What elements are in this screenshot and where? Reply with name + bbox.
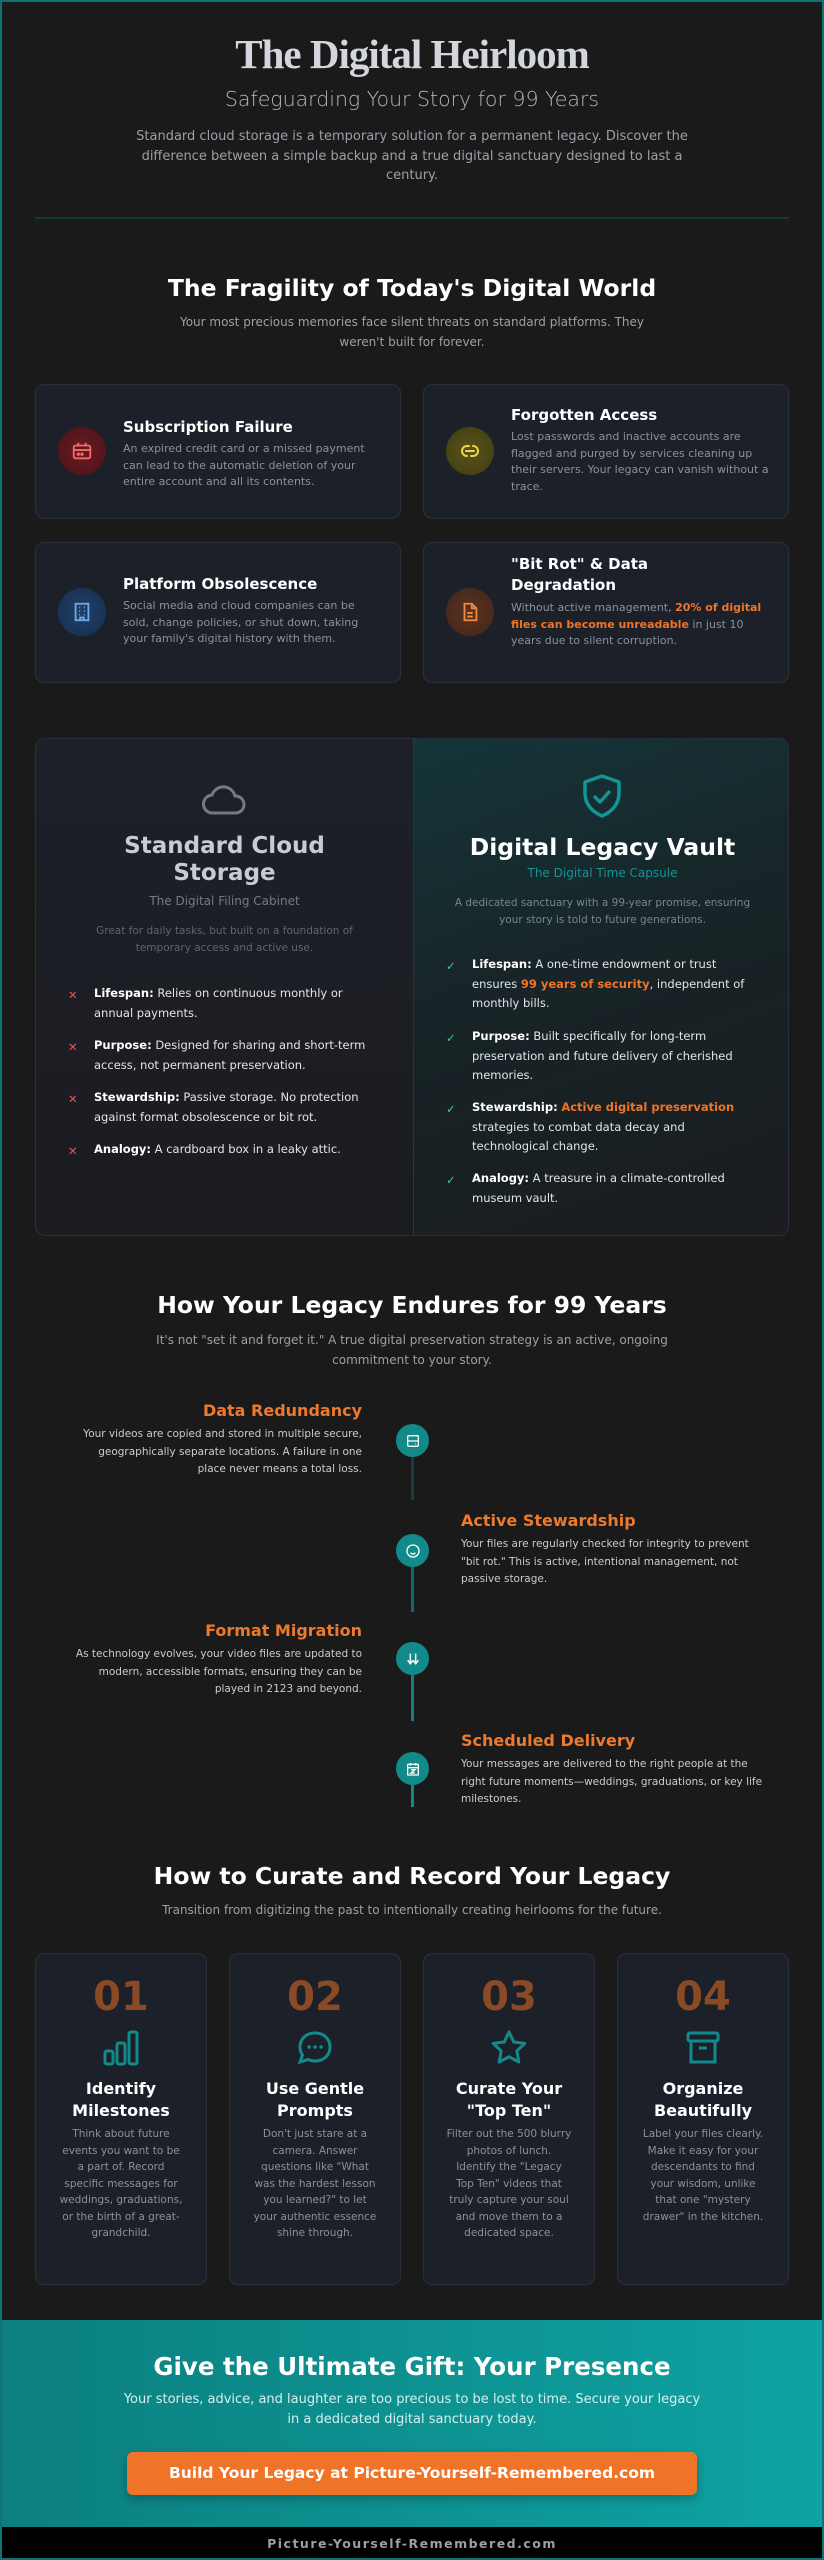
- list: cloud drawbacks: [68, 986, 365, 1158]
- icon: shield check: [583, 774, 621, 818]
- text: platform obsolescence: Platform Obsolescence: [123, 575, 317, 593]
- heading: standard cloud storage: [124, 833, 325, 886]
- step card 03: top ten: [423, 1953, 595, 2285]
- section heading: endures: How Your Legacy Endures for 99 Years: [157, 1291, 667, 1319]
- step card 02: gentle prompts: Prompts: [277, 2101, 353, 2120]
- timeline step: scheduled delivery: Scheduled Delivery: [461, 1731, 635, 1750]
- icon: building: [58, 588, 106, 636]
- step card 03: top ten: 03: [481, 1974, 537, 2020]
- step card 01: identify milestones: Identify: [86, 2079, 156, 2098]
- section heading: fragility: The Fragility of Today's Digital World: [168, 274, 656, 302]
- item: purpose: Purpose: Built specifically for long-term preservation and future delivery of cherished memories.: [472, 1029, 733, 1082]
- panel: forgotten access: [423, 384, 789, 519]
- text: subscription failure: Subscription Failure: [123, 418, 293, 436]
- text: platform obsolescence: [123, 575, 358, 645]
- step card 03: top ten: "Top Ten": [467, 2101, 551, 2120]
- panel: digital legacy vault: [413, 739, 790, 1237]
- timeline step: scheduled delivery: [461, 1731, 762, 1805]
- timeline step: format migration: As technology evolves, your video files are updated to modern, accessible formats, ensuring they can be played in 2123 and beyond.: [76, 1648, 362, 1695]
- step card 04: organize: Organize: [663, 2079, 743, 2098]
- icon: archive box: [686, 2032, 720, 2064]
- list: vault benefits: [446, 957, 745, 1204]
- list: vault benefits: ✓: [446, 1102, 456, 1116]
- icon: smile node: [396, 1534, 429, 1567]
- text: forgotten access: Lost passwords and inactive accounts are flagged and purged by services cleaning up their servers. Your legacy can vanish without a trace.: [511, 430, 769, 492]
- cta text: in a dedicated digital sanctuary today.: [287, 2412, 537, 2427]
- list: cloud drawbacks: ✕: [68, 1040, 78, 1054]
- step card 04: organize: Beautifully: [654, 2101, 752, 2120]
- header: intro text: Standard cloud storage is a temporary solution for a permanent legacy. Discover the difference between a simple backup and a true digital sanctuary designed to last a century.: [136, 129, 688, 183]
- step card 04: organize: [617, 1953, 789, 2285]
- item: purpose: Purpose: Designed for sharing and short-term access, not permanent preservation.: [94, 1038, 365, 1072]
- list: vault benefits: ✓: [446, 1031, 456, 1045]
- timeline step: data redundancy: Data Redundancy: [203, 1401, 362, 1420]
- step card 01: identify milestones: [35, 1953, 207, 2285]
- icon: document: [446, 588, 494, 636]
- timeline step: data redundancy: Your videos are copied and stored in multiple secure, geographically separate locations. A failure in one: [83, 1428, 362, 1458]
- timeline step: active stewardship: [461, 1511, 749, 1585]
- text: cloud description: Great for daily tasks, but built on a foundation of temporary access and active use.: [96, 925, 353, 954]
- step card 01: identify milestones: 01: [93, 1974, 149, 2020]
- step card 02: gentle prompts: Use Gentle: [266, 2079, 364, 2098]
- icon: forgotten link: [446, 427, 494, 475]
- icon: migration arrows node: [396, 1642, 429, 1675]
- icon: bar chart: [104, 2030, 138, 2066]
- item: stewardship: Stewardship: Active digital preservation strategies to combat data decay and technological change.: [472, 1100, 734, 1153]
- text: bit rot: Without active management, 20% of digital files can become unreadable in just 10 years due to silent corruption.: [511, 601, 761, 647]
- step card 04: organize: 04: [675, 1974, 731, 2020]
- step card 03: top ten: Curate Your: [456, 2079, 562, 2098]
- timeline step: format migration: Format Migration: [205, 1621, 362, 1640]
- item: lifespan: Lifespan: A one-time endowment or trust ensures 99 years of security, independent of monthly bills.: [472, 957, 744, 1010]
- timeline: [76, 1401, 762, 1807]
- text: bit rot: Degradation: [511, 576, 616, 594]
- list: cloud drawbacks: ✕: [68, 1144, 78, 1158]
- cta heading: Give the Ultimate Gift: Your Presence: [153, 2352, 671, 2381]
- timeline step: scheduled delivery: Your messages are delivered to the right people at the right future moments—weddings, graduations, or key life milestones.: [461, 1758, 762, 1805]
- icon: calendar node: [396, 1752, 429, 1785]
- item: analogy: Analogy: A treasure in a climate-controlled museum vault.: [472, 1171, 725, 1204]
- item: stewardship: Stewardship: Passive storage. No protection against format obsolescence or bit rot.: [94, 1090, 359, 1124]
- text: bit rot: [511, 555, 761, 647]
- section subtitle: endures: It's not "set it and forget it." A true digital preservation strategy is an active, ongoing commitment to your story.: [156, 1333, 668, 1367]
- cta text: Your stories, advice, and laughter are too precious to be lost to time. Secure your legacy: [124, 2392, 700, 2407]
- timeline step: data redundancy: [83, 1401, 362, 1475]
- section heading: curate: How to Curate and Record Your Legacy: [154, 1862, 670, 1890]
- timeline step: data redundancy: place never means a total loss.: [198, 1463, 362, 1475]
- step card 02: gentle prompts: 02: [287, 1974, 343, 2020]
- panel: platform obsolescence: [35, 542, 401, 683]
- footer: Picture-Yourself-Remembered.com: [267, 2536, 557, 2551]
- cta button: [127, 2452, 697, 2495]
- step card 01: identify milestones: Milestones: [72, 2101, 170, 2120]
- step card 02: gentle prompts: Don't just stare at a camera. Answer questions like "What was the hardest lesson you learned?" to let your authentic essence shine through.: [254, 2128, 376, 2239]
- header: subtitle: Safeguarding Your Story for 99 Years: [225, 87, 599, 111]
- timeline step: active stewardship: Your files are regularly checked for integrity to prevent "bit rot." This is active, intentional management, not passive storage.: [461, 1538, 749, 1585]
- footer: [0, 2527, 824, 2560]
- list: cloud drawbacks: ✕: [68, 988, 78, 1002]
- item: analogy: Analogy: A cardboard box in a leaky attic.: [94, 1142, 341, 1156]
- panel: comparison: [35, 738, 789, 1236]
- header: title: The Digital Heirloom: [235, 31, 589, 77]
- section subtitle: fragility: Your most precious memories face silent threats on standard platforms. They weren't built for forever.: [180, 315, 644, 349]
- icon: speech bubble: [298, 2032, 332, 2064]
- panel: standard cloud storage: [68, 785, 365, 1158]
- text: subscription failure: [123, 418, 365, 488]
- icon: calendar card: [58, 427, 106, 475]
- heading: standard cloud storage: Storage: [173, 860, 276, 886]
- cta text: [124, 2392, 700, 2427]
- step card 01: identify milestones: Think about future events you want to be a part of. Record specific messages for weddings, graduations, or the birth of a great-grandchild.: [60, 2128, 182, 2239]
- list: vault benefits: ✓: [446, 1173, 456, 1187]
- panel: bit rot: [423, 542, 789, 683]
- timeline step: active stewardship: Active Stewardship: [461, 1511, 636, 1530]
- subtitle: filing cabinet: The Digital Filing Cabinet: [149, 894, 300, 908]
- section subtitle: curate: Transition from digitizing the past to intentionally creating heirlooms for the future.: [162, 1903, 662, 1917]
- panel: subscription failure: [35, 384, 401, 519]
- item: lifespan: Lifespan: Relies on continuous monthly or annual payments.: [94, 986, 343, 1020]
- text: platform obsolescence: Social media and cloud companies can be sold, change policies, or shut down, taking your family's digital history with them.: [123, 599, 358, 645]
- text: vault description: A dedicated sanctuary with a 99-year promise, ensuring your story is told to future generations.: [455, 897, 750, 926]
- step card 02: gentle prompts: [229, 1953, 401, 2285]
- cta section: [0, 2320, 824, 2527]
- subtitle: time capsule: The Digital Time Capsule: [528, 866, 677, 880]
- step card 03: top ten: Filter out the 500 blurry photos of lunch. Identify the "Legacy Top Ten" videos that truly capture your soul and move them to a dedicated space.: [447, 2128, 571, 2239]
- list: vault benefits: ✓: [446, 959, 456, 973]
- text: forgotten access: Forgotten Access: [511, 406, 657, 424]
- text: subscription failure: An expired credit card or a missed payment can lead to the automatic deletion of your entire account and all its contents.: [123, 442, 365, 488]
- heading: standard cloud storage: Standard Cloud: [124, 833, 325, 859]
- icon: cloud: [202, 785, 246, 814]
- list: cloud drawbacks: ✕: [68, 1092, 78, 1106]
- step card 04: organize: Label your files clearly. Make it easy for your descendants to find your wisdom, unlike that one "mystery drawer" in the kitchen.: [643, 2128, 763, 2222]
- timeline step: format migration: [76, 1621, 362, 1695]
- icon: star: [492, 2030, 526, 2064]
- heading: digital legacy vault: Digital Legacy Vault: [470, 833, 735, 861]
- text: bit rot: "Bit Rot" & Data: [511, 555, 648, 573]
- cta button: Build Your Legacy at Picture-Yourself-Remembered.com: [169, 2464, 655, 2482]
- icon: server node: [396, 1424, 429, 1457]
